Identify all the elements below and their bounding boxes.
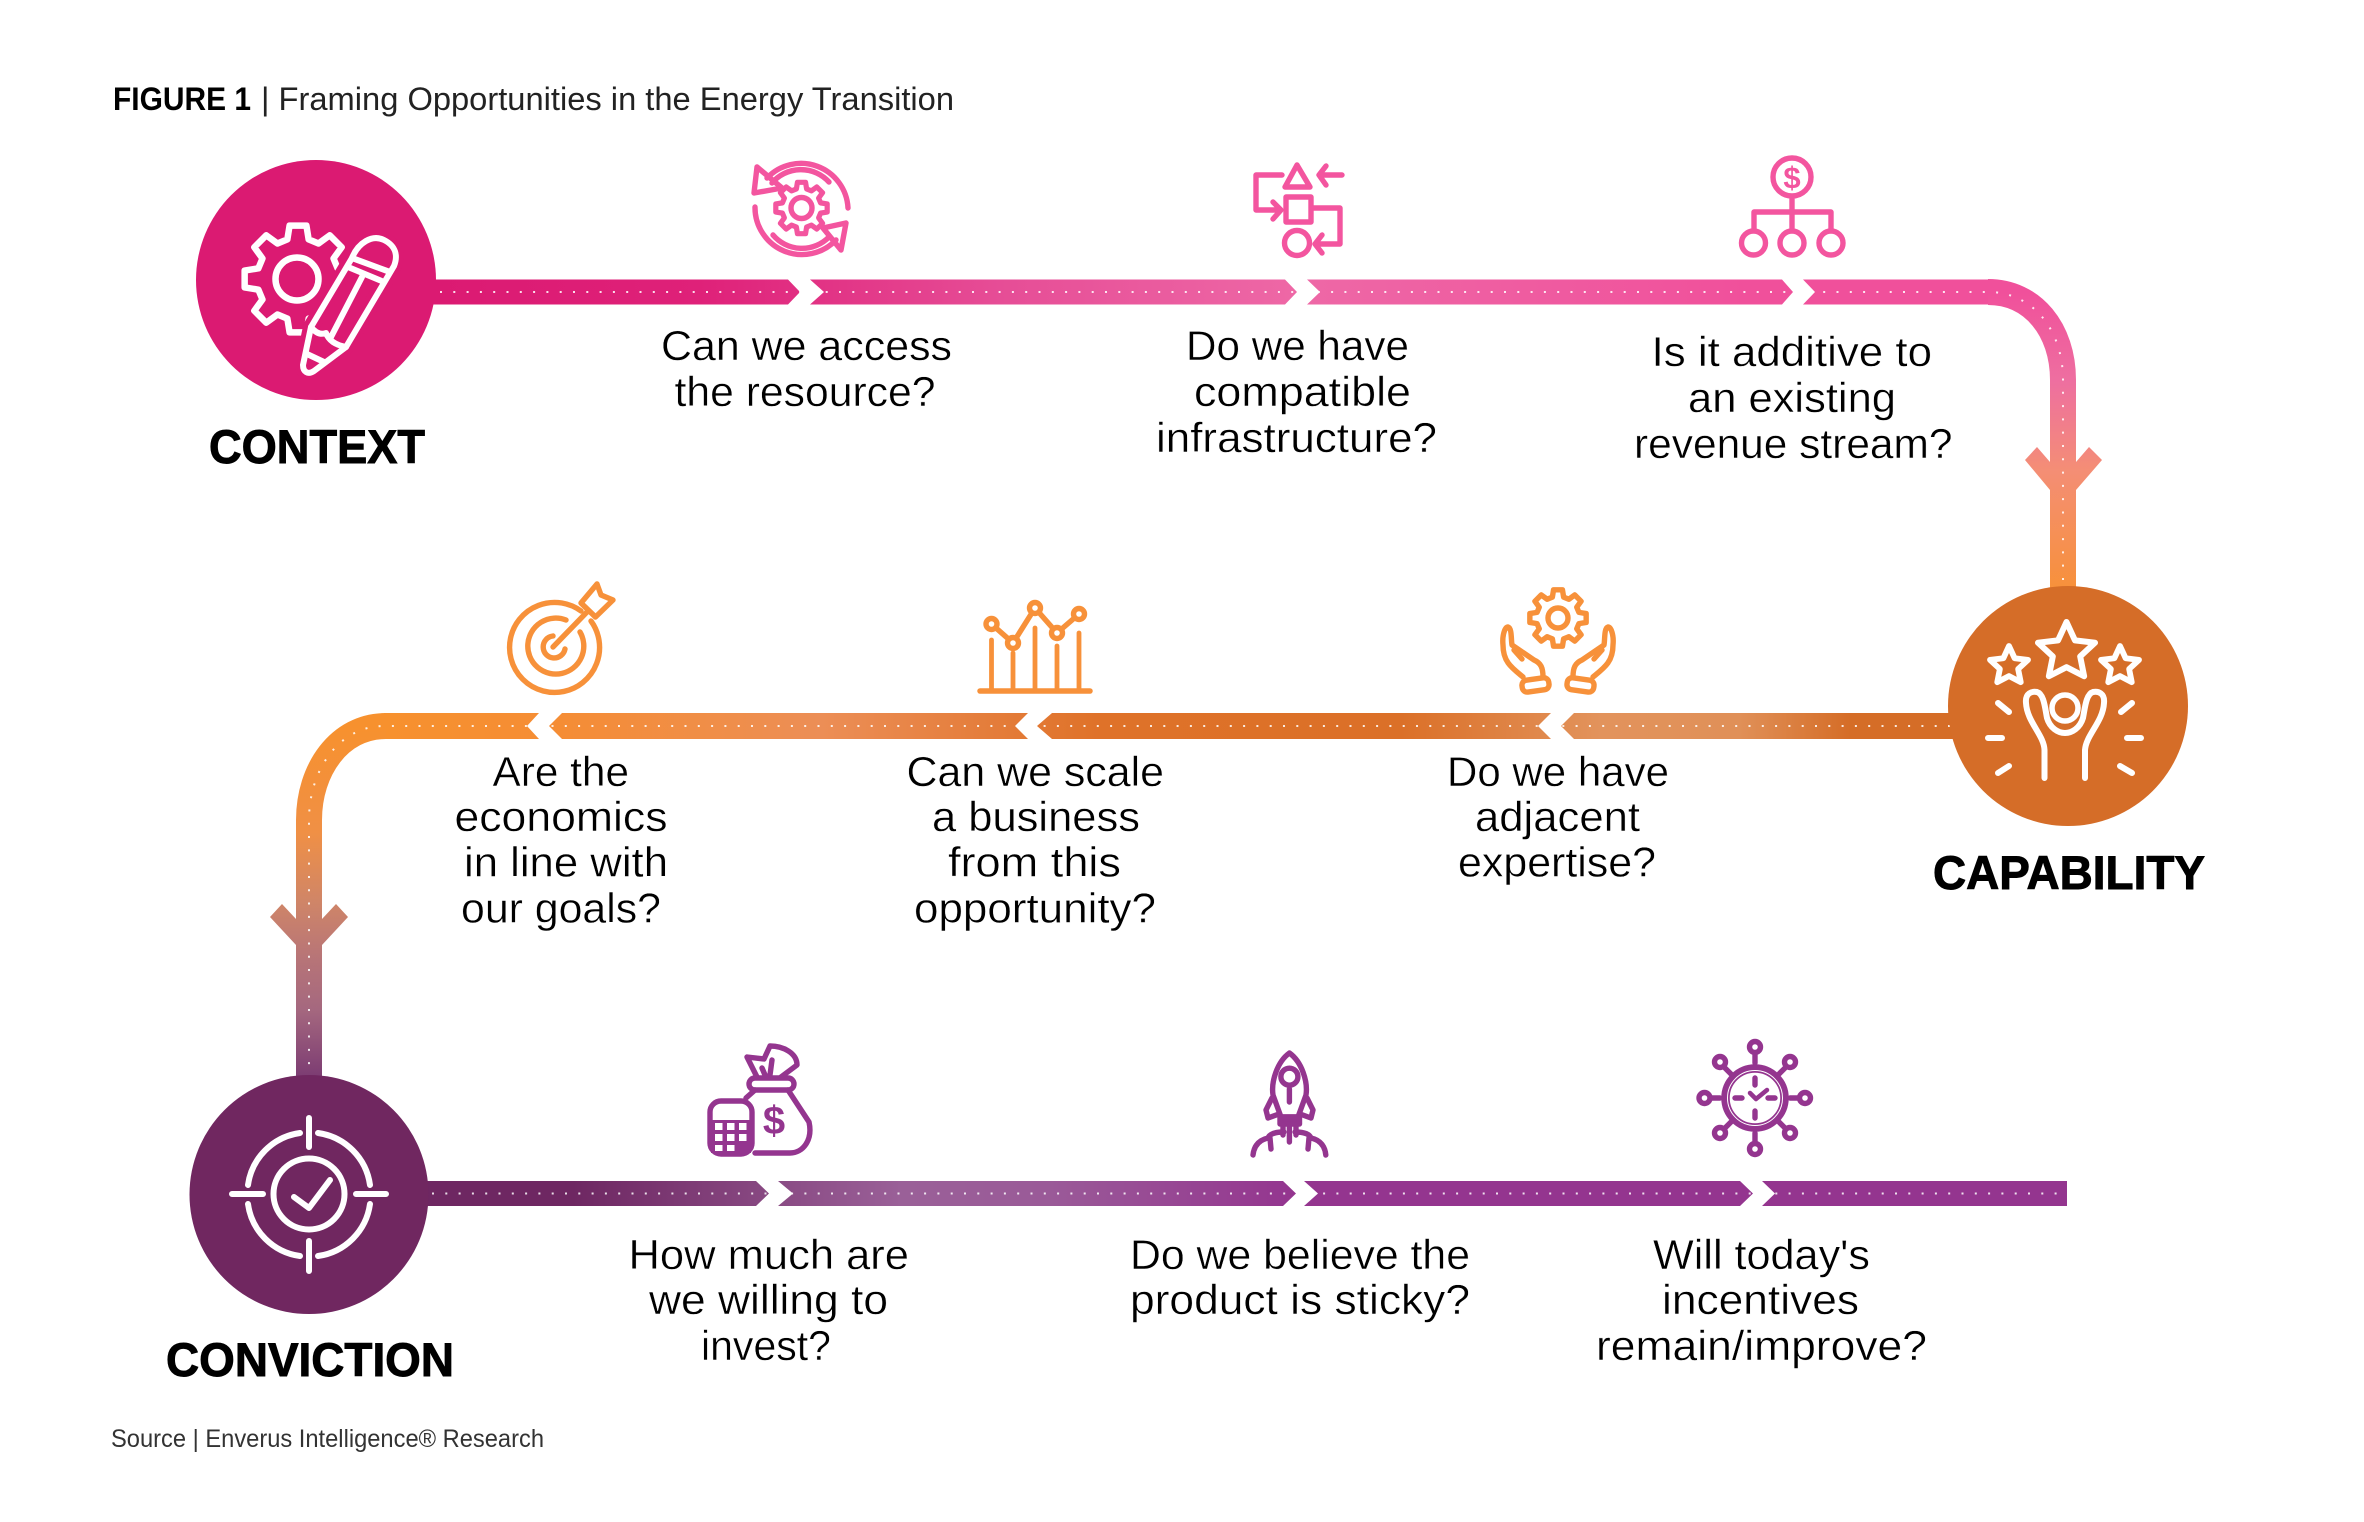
icon: money bag and calculator: $ (763, 1099, 785, 1143)
path: capability row (270, 713, 1960, 1080)
icon: clock hub (1699, 1042, 1810, 1154)
icon: resource cycle gear (754, 163, 848, 255)
question: product stickiness: product is sticky? (1130, 1276, 1470, 1323)
question: economics in line with goals: economics (454, 793, 668, 840)
title: FIGURE 1 (113, 81, 251, 117)
question: compatible infrastructure: infrastructure? (1156, 414, 1437, 461)
panel: context node (196, 160, 436, 400)
icon: target and arrow (510, 584, 613, 692)
question: incentives: Will today's (1653, 1231, 1870, 1278)
question: scale a business: a business (932, 793, 1140, 840)
icon: hands holding gear (1503, 590, 1613, 693)
source note: Source | Enverus Intelligence® Research (111, 1425, 544, 1453)
question: adjacent expertise: adjacent (1475, 793, 1640, 840)
question: scale a business: opportunity? (914, 884, 1156, 932)
question: compatible infrastructure: compatible (1194, 368, 1411, 415)
title: | Framing Opportunities in the Energy Transition (261, 81, 954, 117)
icon: person reaching for stars (1988, 622, 2141, 778)
question: can we access the resource: the resource? (674, 368, 936, 415)
icon: money bag and calculator (710, 1046, 810, 1154)
icon: rocket (1253, 1053, 1326, 1155)
question: scale a business (906, 748, 1164, 932)
question: additive to revenue stream: revenue stream? (1634, 420, 1952, 467)
question: compatible infrastructure (1156, 322, 1437, 461)
question: adjacent expertise (1447, 748, 1669, 886)
icon: revenue tree (1742, 158, 1843, 255)
question: adjacent expertise: Do we have (1447, 748, 1669, 795)
question: additive to revenue stream: an existing (1688, 374, 1896, 421)
question: adjacent expertise: expertise? (1458, 838, 1656, 886)
path: context row (430, 280, 2102, 592)
question: product stickiness: Do we believe the (1130, 1231, 1470, 1278)
icon: compatible infrastructure flow (1256, 165, 1342, 256)
question: how much to invest (628, 1231, 909, 1369)
label: conviction: CONVICTION (166, 1333, 454, 1386)
question: how much to invest: invest? (701, 1322, 831, 1369)
question: can we access the resource: Can we access (661, 322, 952, 369)
icon: target with check (232, 1118, 386, 1271)
icon: growth chart (980, 602, 1090, 691)
question: incentives: remain/improve? (1596, 1322, 1927, 1369)
label: capability: CAPABILITY (1933, 846, 2205, 899)
icon: revenue tree: $ (1783, 160, 1801, 195)
panel: capability node (1948, 586, 2188, 826)
question: scale a business: Can we scale (906, 748, 1164, 795)
question: incentives: incentives (1662, 1276, 1859, 1323)
question: incentives (1596, 1231, 1927, 1369)
question: how much to invest: we willing to (648, 1276, 888, 1323)
path: conviction row (425, 1181, 2067, 1206)
question: scale a business: from this (948, 838, 1121, 886)
question: economics in line with goals (454, 748, 668, 932)
label: context: CONTEXT (209, 420, 425, 473)
question: how much to invest: How much are (628, 1231, 909, 1278)
question: economics in line with goals: Are the (492, 748, 629, 795)
icon: gear and pencil (245, 226, 396, 373)
question: economics in line with goals: our goals? (461, 884, 661, 932)
question: compatible infrastructure: Do we have (1186, 322, 1409, 369)
panel: conviction node (190, 1075, 428, 1314)
question: economics in line with goals: in line with (464, 838, 668, 886)
question: additive to revenue stream (1634, 328, 1952, 467)
question: can we access the resource (661, 322, 952, 415)
question: additive to revenue stream: Is it additive to (1652, 328, 1932, 375)
question: product stickiness (1130, 1231, 1470, 1323)
